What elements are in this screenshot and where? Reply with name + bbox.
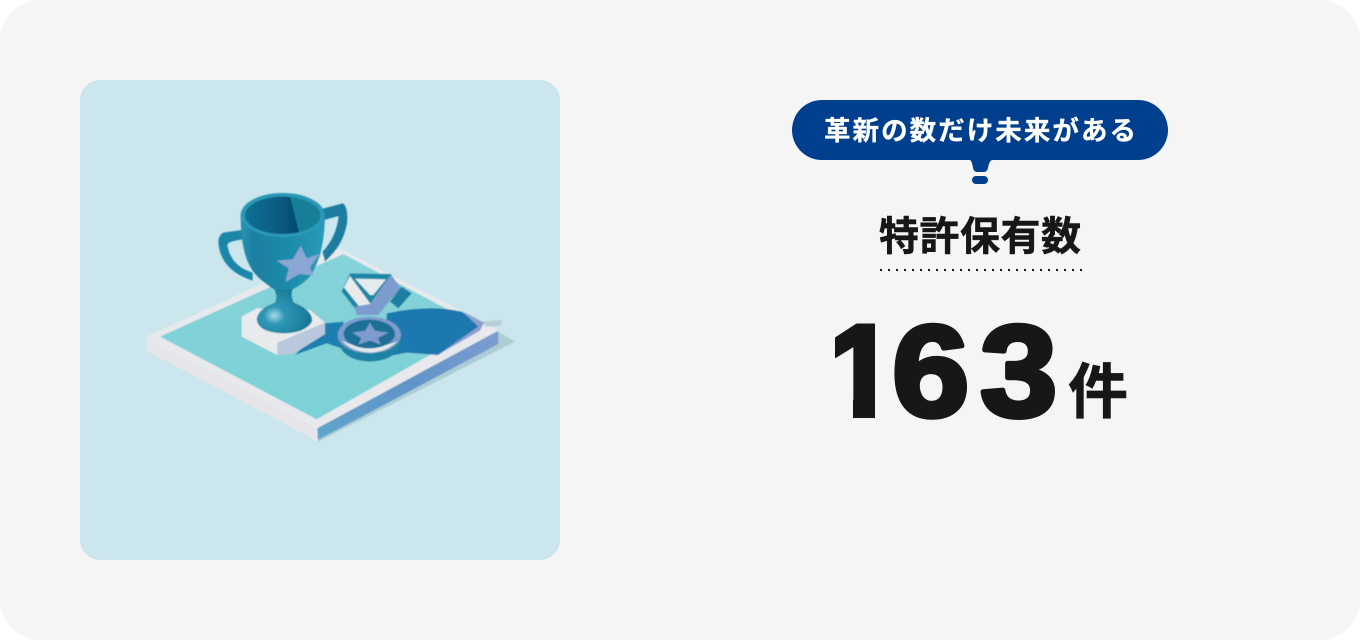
ribbon bbox=[342, 273, 401, 315]
handles bbox=[218, 229, 253, 281]
unit: 件 bbox=[1068, 359, 1128, 426]
speech bubble bbox=[792, 100, 1168, 184]
icon: trophy and medal on platform bbox=[147, 193, 515, 442]
number value: 1 bbox=[826, 298, 898, 444]
bubble tail bbox=[970, 160, 992, 172]
dotted underline bbox=[880, 269, 1082, 271]
medal star bbox=[352, 323, 389, 345]
bubble dot bbox=[972, 176, 988, 184]
panel: illustration bbox=[80, 80, 560, 560]
stem and foot bbox=[257, 287, 312, 333]
number value bbox=[835, 322, 1055, 420]
bubble text: 革新の数だけ未来がある bbox=[824, 116, 1136, 146]
trophy bbox=[218, 193, 347, 355]
platform bbox=[147, 248, 515, 442]
cup body bbox=[241, 213, 325, 289]
shadow bbox=[295, 308, 484, 357]
heading: 特許保有数 bbox=[879, 215, 1081, 259]
disc bbox=[339, 323, 401, 362]
star bbox=[277, 246, 319, 282]
number value: 3 bbox=[980, 298, 1057, 444]
octagonal base bbox=[242, 308, 325, 355]
cup interior bbox=[244, 196, 320, 234]
number value: 6 bbox=[892, 298, 969, 444]
medal bbox=[338, 273, 412, 362]
